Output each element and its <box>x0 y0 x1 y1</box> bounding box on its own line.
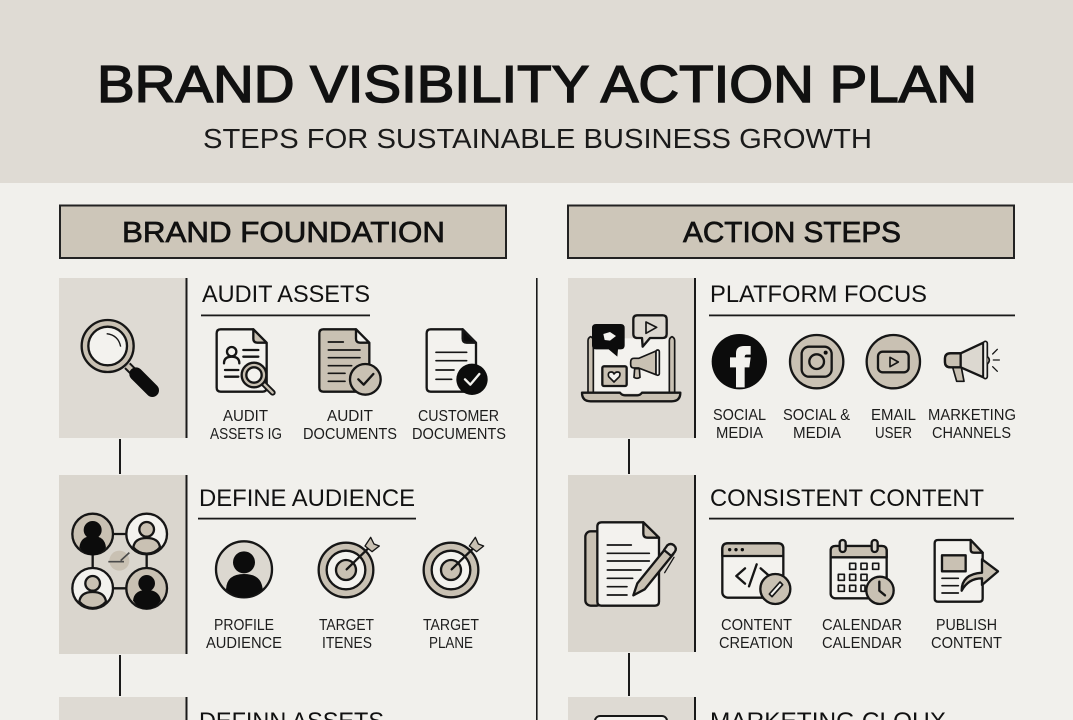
subtitle: STEPS FOR SUSTAINABLE BUSINESS GROWTH <box>203 123 872 154</box>
item: social and media <box>783 335 851 442</box>
icon panel: document and pen <box>568 475 696 652</box>
section heading: action steps: ACTION STEPS <box>683 217 901 249</box>
icon panel: marketing cloux <box>568 697 696 720</box>
step: define audience <box>59 475 484 654</box>
step: consistent content <box>568 475 1014 652</box>
connector <box>628 439 630 474</box>
item: content creation: CONTENT <box>721 617 792 634</box>
item: marketing channels: CHANNELS <box>932 425 1011 442</box>
item: audit documents <box>303 329 397 443</box>
icon panel: laptop with social media <box>568 278 696 438</box>
heading: audit assets: AUDIT ASSETS <box>202 281 370 308</box>
item: target itenes: ITENES <box>322 635 372 652</box>
item: calendar: CALENDAR <box>822 617 902 634</box>
item: social media: SOCIAL <box>713 407 766 424</box>
step: audit assets <box>59 278 506 443</box>
item: email user <box>867 335 920 442</box>
item: audit documents: AUDIT <box>327 408 374 425</box>
item: customer documents: DOCUMENTS <box>412 426 506 443</box>
section heading: brand foundation: BRAND FOUNDATION <box>122 217 445 249</box>
item: audit assets ig: ASSETS IG <box>210 426 282 443</box>
item: target plane: TARGET <box>423 617 479 634</box>
item: social media <box>712 334 767 442</box>
item: content creation <box>719 543 793 652</box>
item: calendar: CALENDAR <box>822 635 902 652</box>
item: publish content <box>931 540 1002 652</box>
item: profile audience: AUDIENCE <box>206 635 282 652</box>
item: audit assets ig: AUDIT <box>223 408 269 425</box>
item: profile audience <box>206 541 282 652</box>
item: social media: MEDIA <box>716 425 764 442</box>
item: customer documents: CUSTOMER <box>418 408 499 425</box>
item: content creation: CREATION <box>719 635 793 652</box>
icon panel: define assets <box>59 697 188 720</box>
connector <box>119 439 121 474</box>
item: marketing channels: MARKETING <box>928 407 1016 424</box>
step: define assets (cropped) <box>59 697 384 720</box>
title: BRAND VISIBILITY ACTION PLAN <box>97 56 977 114</box>
item: target plane <box>423 537 484 652</box>
item: target plane: PLANE <box>429 635 473 652</box>
heading: consistent content: CONSISTENT CONTENT <box>710 485 984 512</box>
item: publish content: CONTENT <box>931 635 1002 652</box>
icon panel: audit assets <box>59 278 188 438</box>
icon panel: audience network <box>59 475 188 654</box>
item: social and media: MEDIA <box>793 425 842 442</box>
item: audit documents: DOCUMENTS <box>303 426 397 443</box>
item: target itenes <box>319 537 379 652</box>
item: customer documents <box>412 329 506 443</box>
heading: define audience: DEFINE AUDIENCE <box>199 485 415 512</box>
item: profile audience: PROFILE <box>214 617 274 634</box>
item: social and media: SOCIAL & <box>783 407 851 424</box>
header band <box>0 0 1073 183</box>
step: platform focus <box>568 278 1016 442</box>
connector <box>119 655 121 696</box>
heading: platform focus: PLATFORM FOCUS <box>710 281 927 308</box>
item: marketing channels <box>928 341 1016 442</box>
item: email user: EMAIL <box>871 407 916 424</box>
item: audit assets ig <box>210 329 282 443</box>
item: publish content: PUBLISH <box>936 617 997 634</box>
column divider <box>536 278 538 720</box>
item: calendar <box>822 540 902 652</box>
item: email user: USER <box>875 425 912 442</box>
item: target itenes: TARGET <box>319 617 374 634</box>
step: marketing cloux (cropped) <box>568 697 946 720</box>
connector <box>628 653 630 696</box>
section heading: action steps <box>568 206 1014 258</box>
section heading: brand foundation <box>60 206 506 258</box>
